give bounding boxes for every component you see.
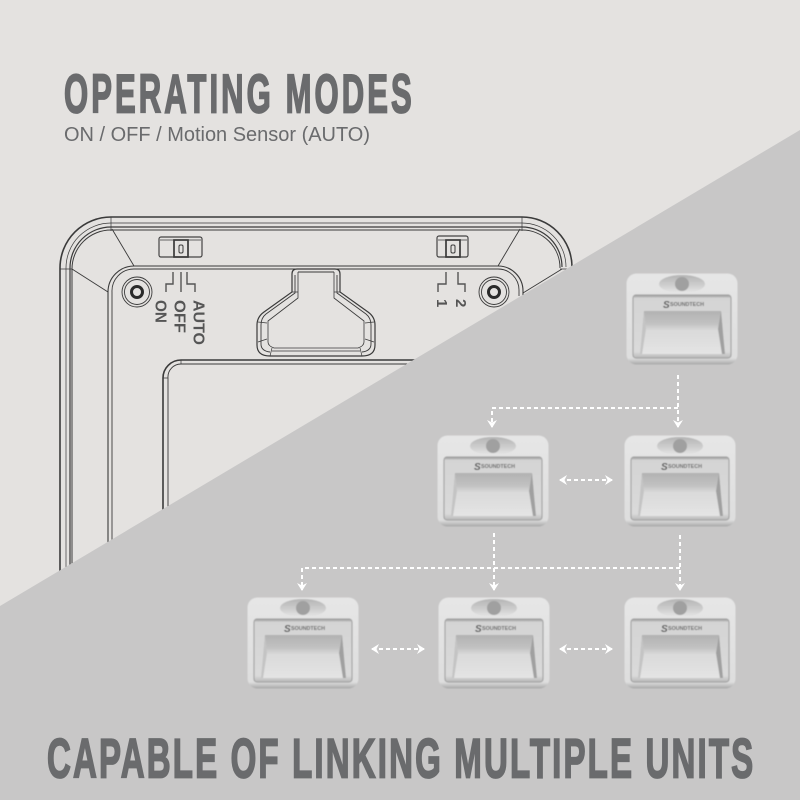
label: AUTO: AUTO — [190, 300, 206, 345]
arrow: two-way between bottom left and centre — [372, 648, 424, 650]
arrow: middle right down to bottom right — [679, 535, 681, 590]
title: operating modes: OPERATING MODES — [64, 65, 412, 125]
arrow: branch to bottom left — [302, 568, 680, 590]
device unit: middle right: SOUNDTECH — [668, 464, 702, 470]
device unit: top: S — [663, 300, 670, 311]
label: 1: 1 — [433, 299, 450, 307]
device unit: bottom right: SOUNDTECH — [668, 626, 702, 632]
inner plate outline — [107, 266, 524, 542]
screw left — [122, 277, 152, 307]
device unit: bottom centre — [438, 598, 550, 688]
outer housing outline — [59, 216, 573, 571]
arrow: top unit down to middle right unit — [677, 375, 679, 427]
device unit: middle right: S — [661, 462, 668, 473]
device unit: middle left: S — [474, 462, 481, 473]
device unit: bottom centre: SOUNDTECH — [482, 626, 516, 632]
heading: capable of linking multiple units: CAPABLE OF LINKING MULTIPLE UNITS — [47, 726, 753, 790]
keyhole mounting slot — [257, 269, 375, 356]
device unit: middle right — [624, 436, 736, 526]
device unit: middle left: SOUNDTECH — [481, 464, 515, 470]
line drawing: device back plate — [59, 216, 573, 571]
inner window opening — [162, 359, 415, 510]
device unit: bottom left: S — [284, 624, 291, 635]
device unit: middle left — [438, 436, 548, 526]
device unit: bottom right — [624, 598, 736, 688]
switch position markers left — [166, 272, 195, 292]
arrow: two-way between bottom centre and right — [560, 648, 612, 650]
label: OFF: OFF — [170, 300, 188, 333]
device unit: bottom right: S — [661, 624, 668, 635]
arrow: branch to middle left unit — [492, 408, 678, 427]
device unit: bottom centre: S — [475, 624, 482, 635]
arrow: middle left down to bottom centre — [493, 533, 495, 590]
device unit: top — [626, 274, 738, 364]
device unit: top: SOUNDTECH — [670, 302, 704, 308]
switch right — [437, 236, 468, 257]
device unit: bottom left — [248, 598, 358, 688]
switch position markers right — [438, 272, 465, 292]
switch left — [159, 237, 202, 257]
device unit: bottom left: SOUNDTECH — [291, 626, 325, 632]
screw right — [479, 277, 509, 307]
subtitle: modes list: ON / OFF / Motion Sensor (AUTO) — [64, 124, 370, 146]
label: 2: 2 — [452, 299, 469, 307]
label: ON: ON — [152, 300, 168, 323]
arrow: two-way between middle units — [560, 479, 612, 481]
